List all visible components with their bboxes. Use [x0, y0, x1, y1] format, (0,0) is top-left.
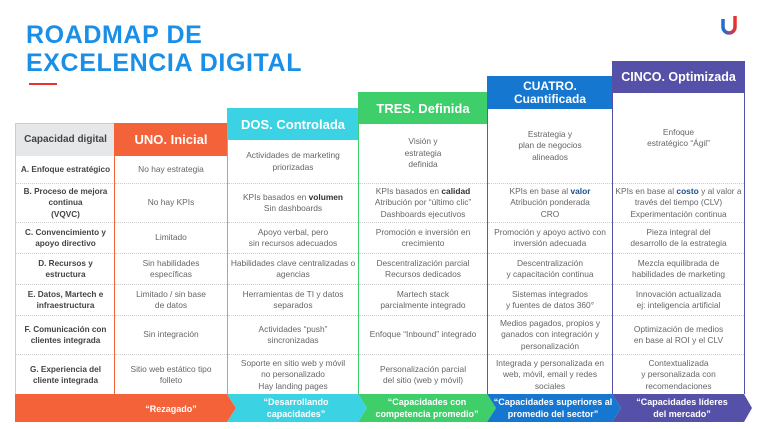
panel: CUATRO: Integrada y personalizada en web, móvil, email y redes sociales: [496, 358, 604, 391]
panel: CINCO: recomendaciones: [645, 381, 712, 391]
panel: CUATRO: Atribución ponderada: [510, 197, 590, 207]
panel: CINCO: ej: inteligencia artificial: [637, 300, 720, 310]
panel: UNO: de datos: [155, 300, 187, 310]
footer: maturity chevrons: [15, 394, 752, 422]
header: CINCO: CINCO. Optimizada: [621, 70, 736, 84]
panel: TRES: Promoción e inversión en: [376, 227, 470, 237]
panel: capacidad digital labels: G. Experiencia del cliente integrada: [30, 365, 101, 385]
panel: CINCO: Innovación actualizada: [636, 289, 721, 299]
header: CUATRO: Cuantificada: [514, 92, 586, 106]
header: CUATRO: [488, 77, 612, 109]
panel: TRES: parcialmente integrado: [380, 300, 466, 310]
footer: maturity chevrons: promedio del sector”: [508, 409, 598, 419]
header: UNO: [115, 124, 227, 156]
panel: UNO: [114, 123, 228, 394]
panel: DOS: [227, 108, 359, 394]
panel: UNO: Limitado: [155, 232, 187, 242]
panel: DOS: Habilidades clave centralizadas o agencias: [231, 258, 355, 279]
panel: UNO: Sin integración: [143, 329, 199, 339]
panel: DOS: KPIs basados en volumen: [243, 192, 343, 202]
panel: UNO: No hay estrategia: [138, 164, 204, 174]
panel: capacidad digital labels: D. Recursos y: [38, 259, 93, 268]
title: [26, 21, 302, 77]
panel: DOS: separados: [273, 300, 313, 310]
panel: CUATRO: Sistemas integrados: [512, 289, 588, 299]
panel: DOS: Actividades “push”: [259, 324, 327, 334]
panel: CINCO: en base al ROI y el CLV: [634, 335, 723, 345]
header: DOS: [228, 109, 358, 140]
panel: CUATRO: CRO: [541, 209, 559, 219]
title underline: [29, 83, 57, 85]
panel: DOS: Herramientas de TI y datos: [243, 289, 343, 299]
header: capacidad digital: Capacidad digital: [24, 134, 107, 145]
panel: TRES: estrategia: [405, 148, 441, 158]
panel: CINCO: Contextualizada: [648, 358, 709, 368]
panel: DOS: priorizadas: [272, 162, 313, 172]
panel: CUATRO: Descentralización: [517, 258, 583, 268]
panel: CINCO: estratégico “Ágil”: [647, 138, 710, 148]
panel: TRES: Descentralización parcial: [376, 258, 470, 268]
panel: CINCO: Enfoque: [663, 127, 694, 137]
panel: CINCO: desarrollo de la estrategia: [630, 238, 727, 248]
title: ROADMAP DE: [26, 21, 202, 49]
panel: CINCO: habilidades de marketing: [632, 269, 725, 279]
panel: capacidad digital labels: estructura: [45, 270, 86, 279]
panel: TRES: Martech stack: [397, 289, 449, 299]
header: CUATRO: CUATRO.: [523, 79, 577, 93]
panel: capacidad digital labels: C. Convencimiento y apoyo directivo: [25, 228, 106, 248]
title: EXCELENCIA DIGITAL: [26, 49, 302, 77]
footer: maturity chevrons: del mercado”: [653, 409, 711, 419]
footer: maturity chevrons: “Desarrollando: [263, 397, 329, 407]
panel: DOS: Hay landing pages: [258, 381, 328, 391]
panel: capacidad digital labels: [15, 123, 115, 394]
panel: CINCO: Pieza integral del: [646, 227, 711, 237]
header: DOS: DOS. Controlada: [241, 117, 345, 132]
panel: UNO: Sin habilidades: [143, 258, 199, 268]
panel: CUATRO: y capacitación continua: [506, 269, 594, 279]
panel: TRES: Enfoque “Inbound” integrado: [370, 329, 476, 339]
panel: capacidad digital labels: A. Enfoque estratégico: [21, 165, 110, 174]
footer: maturity chevrons: “Capacidades con: [388, 397, 466, 407]
footer: maturity chevrons: capacidades”: [267, 409, 325, 419]
panel: UNO: folleto: [160, 375, 182, 385]
panel: DOS: Sin dashboards: [264, 203, 322, 213]
panel: TRES: crecimiento: [402, 238, 444, 248]
panel: CUATRO: [487, 76, 613, 394]
panel: UNO: específicas: [150, 269, 192, 279]
header: capacidad digital: [16, 124, 115, 156]
panel: CUATRO: alineados: [532, 152, 568, 162]
header: UNO: UNO. Inicial: [135, 132, 207, 147]
panel: UNO: Limitado / sin base: [136, 289, 206, 299]
panel: capacidad digital labels: F. Comunicación con clientes integrada: [25, 325, 106, 345]
header: CINCO: [613, 62, 744, 93]
header: TRES: [359, 93, 487, 124]
panel: TRES: Recursos dedicados: [385, 269, 461, 279]
panel: CUATRO: Estrategia y: [528, 129, 572, 139]
panel: TRES: Dashboards ejecutivos: [381, 209, 465, 219]
panel: TRES: KPIs basados en calidad: [376, 186, 470, 196]
panel: capacidad digital labels: B. Proceso de mejora continua: [24, 187, 107, 207]
panel: DOS: Apoyo verbal, pero: [258, 227, 328, 237]
panel: CUATRO: y fuentes de datos 360°: [506, 300, 594, 310]
panel: TRES: definida: [408, 159, 438, 169]
panel: CUATRO: KPIs en base al valor: [509, 186, 591, 196]
panel: CINCO: Experimentación continua: [630, 209, 727, 219]
panel: TRES: Atribución por “último clic”: [375, 197, 471, 207]
panel: TRES: [358, 92, 488, 394]
footer: maturity chevrons: competencia promedio”: [375, 409, 479, 419]
panel: CINCO: Mezcla equilibrada de: [638, 258, 719, 268]
panel: TRES: Visión y: [408, 136, 438, 146]
panel: CINCO: y personalizada con: [641, 369, 716, 379]
panel: CINCO: KPIs en base al costo y al valor a través del tiempo (CLV): [615, 186, 742, 207]
panel: CINCO: [612, 61, 745, 394]
panel: CINCO: Optimización de medios: [634, 324, 723, 334]
footer: maturity chevrons: “Capacidades líderes: [636, 397, 728, 407]
footer: maturity chevrons: “Rezagado”: [145, 404, 197, 414]
panel: DOS: no personalizado: [261, 369, 325, 379]
panel: UNO: No hay KPIs: [148, 197, 194, 207]
footer: maturity chevrons: “Capacidades superiores al: [494, 397, 612, 407]
panel: DOS: Soporte en sitio web y móvil: [241, 358, 345, 368]
panel: UNO: Sitio web estático tipo: [130, 364, 212, 374]
panel: CUATRO: plan de negocios: [518, 140, 582, 150]
icon: logo: [721, 16, 737, 35]
panel: CUATRO: Medios pagados, propios y ganados con integración y personalización: [500, 318, 600, 351]
panel: capacidad digital labels: (VQVC): [51, 210, 80, 219]
header: TRES: TRES. Definida: [376, 101, 470, 116]
panel: DOS: sincronizadas: [267, 335, 319, 345]
panel: CUATRO: Promoción y apoyo activo con inversión adecuada: [494, 227, 606, 248]
panel: DOS: sin recursos adecuados: [249, 238, 337, 248]
panel: DOS: Actividades de marketing: [246, 150, 340, 160]
panel: TRES: del sitio (web y móvil): [383, 375, 463, 385]
panel: TRES: Personalización parcial: [380, 364, 466, 374]
panel: capacidad digital labels: E. Datos, Martech e infraestructura: [28, 290, 103, 310]
